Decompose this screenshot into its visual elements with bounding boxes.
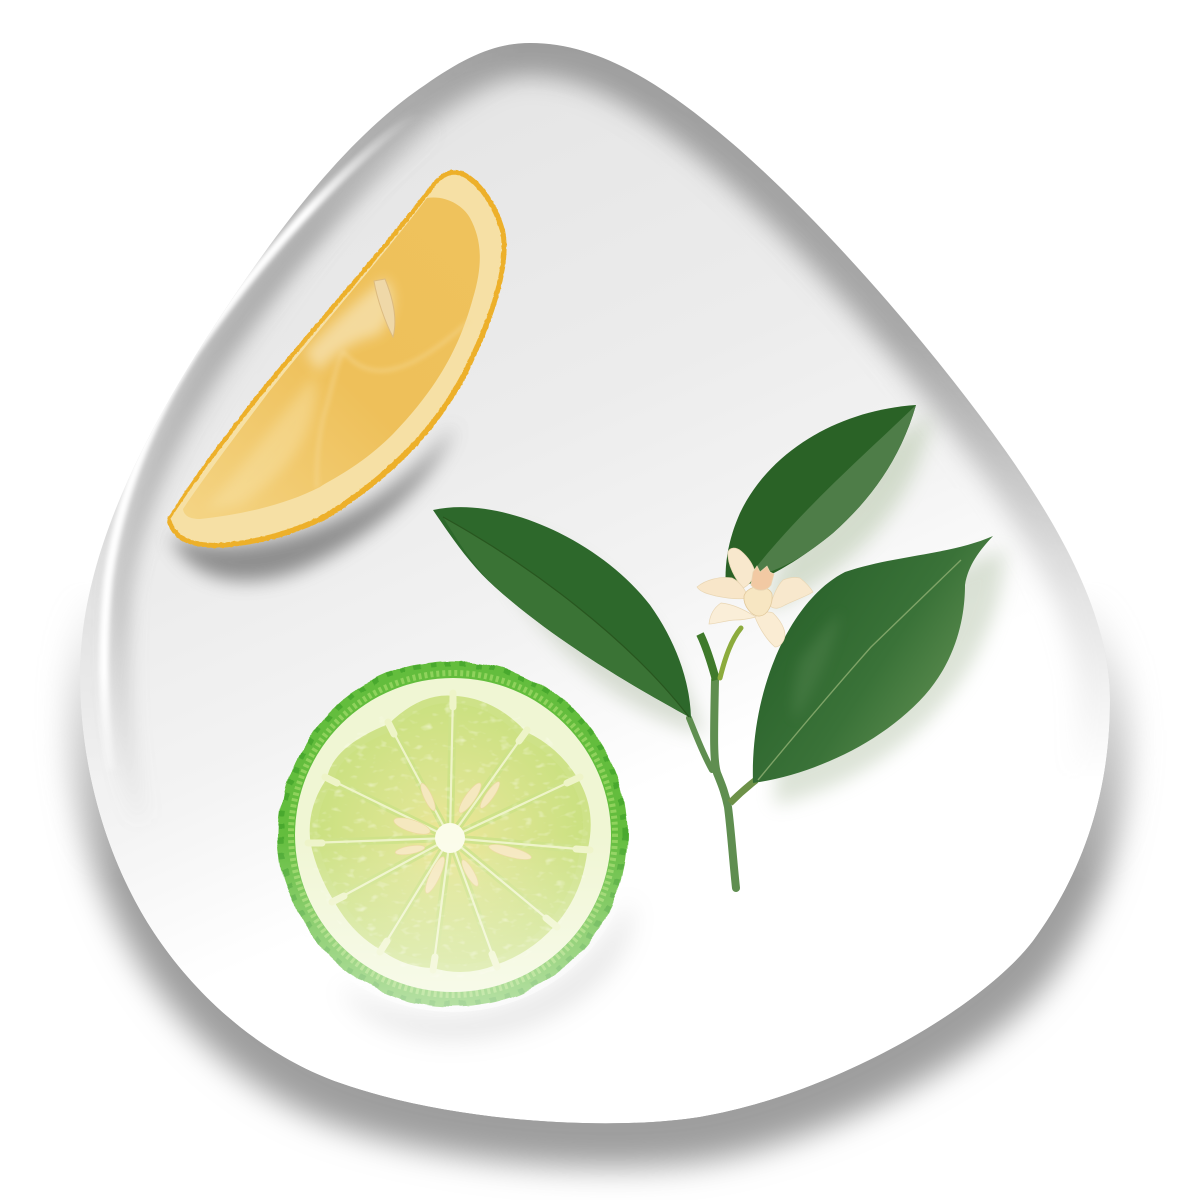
lemon segment membrane [317, 320, 470, 488]
right leaf [753, 536, 993, 783]
lemon shadow [170, 425, 455, 581]
upper right leaf [726, 405, 916, 590]
plate edge shading [84, 43, 1110, 724]
rim inner shade [109, 162, 393, 771]
lemon peel [167, 170, 507, 548]
lime shadow [340, 900, 632, 1040]
segment dividers [308, 693, 590, 970]
lemon flesh sheen [205, 375, 316, 510]
peel [279, 661, 627, 1007]
core [435, 823, 465, 853]
peel inner edge [291, 673, 615, 995]
lemon seed mark [374, 279, 395, 337]
lemon wedge [167, 170, 507, 581]
left leaf [433, 507, 691, 718]
bergamot slice [272, 656, 634, 1012]
blossom pistil [744, 587, 772, 616]
blossom [697, 548, 813, 647]
lemon core membrane [305, 278, 393, 372]
petal: left [697, 577, 748, 599]
citrus sprig shadow [480, 415, 1005, 805]
petal: top [728, 548, 755, 588]
juice vesicle texture [310, 698, 590, 978]
plate surface [80, 43, 1110, 1123]
plate drop shadow [54, 618, 1145, 1188]
citrus sprig [433, 405, 993, 888]
fruit segments [314, 699, 587, 968]
petal: lower right [755, 612, 785, 647]
rim highlight [104, 112, 417, 770]
stamens [751, 566, 774, 590]
petal: lower left [709, 603, 756, 624]
lemon flesh [183, 197, 480, 519]
plate [80, 43, 1110, 1123]
lower fade [272, 656, 634, 1012]
stem [689, 628, 756, 888]
seeds [392, 780, 533, 895]
petal: right [770, 577, 813, 608]
lemon pith [171, 175, 502, 543]
pith [295, 678, 611, 992]
